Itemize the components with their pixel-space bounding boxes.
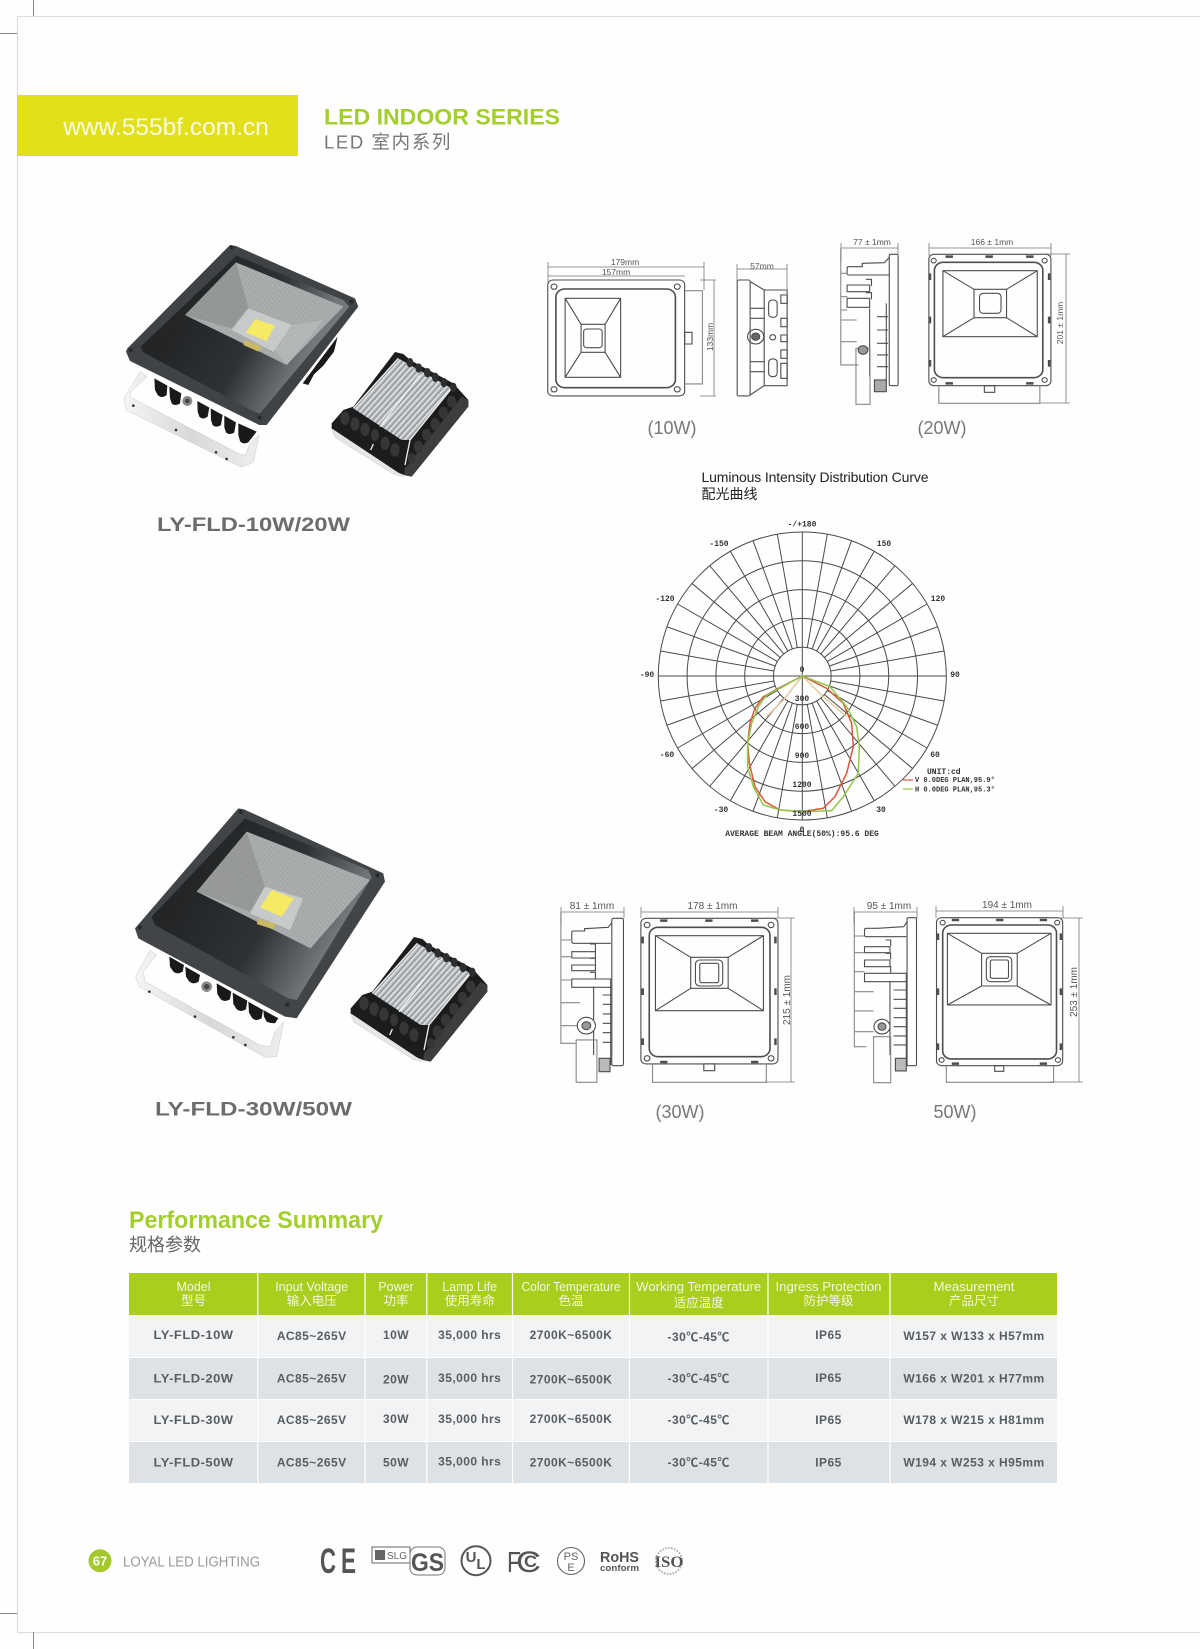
caption: (30W): (30W) <box>656 1102 704 1122</box>
dimension drawing: 30W: 81 ± 1mm <box>570 901 614 912</box>
table header row <box>129 1273 1057 1315</box>
table header row: Model <box>176 1280 211 1294</box>
table row: LY-FLD-10W: -30℃-45℃ <box>668 1330 730 1344</box>
header banner: www.555bf.com.cn <box>62 114 269 141</box>
icon: UL mark: L <box>476 1556 486 1573</box>
polar chart: luminous distribution: -/+180 <box>788 520 817 530</box>
table row: LY-FLD-30W: LY-FLD-30W <box>154 1413 234 1427</box>
table row: LY-FLD-10W: IP65 <box>815 1328 842 1342</box>
polar chart: luminous distribution: 600 <box>795 723 809 732</box>
polar chart: luminous distribution <box>640 520 995 839</box>
dimension drawing: 30W: 215 ± 1mm <box>782 975 793 1025</box>
polar chart: luminous distribution: 150 <box>877 540 891 549</box>
polar chart: luminous distribution: 0 <box>800 666 805 675</box>
dimension drawing: 20W: 77 ± 1mm <box>853 237 891 247</box>
table row: LY-FLD-50W <box>129 1442 1057 1483</box>
header banner <box>17 95 298 156</box>
table row: LY-FLD-30W: AC85~265V <box>277 1413 347 1427</box>
heading: luminous intensity curve: Luminous Intensity Distribution Curve <box>702 469 929 485</box>
table row: LY-FLD-30W <box>129 1400 1057 1441</box>
table row: LY-FLD-20W: 2700K~6500K <box>530 1372 612 1386</box>
dimension drawing: 10W: 157mm <box>602 267 630 277</box>
polar chart: luminous distribution: -120 <box>655 595 675 604</box>
table row: LY-FLD-20W: AC85~265V <box>277 1372 347 1386</box>
dimension drawing: 20W: 201 ± 1mm <box>1055 302 1065 344</box>
polar chart: luminous distribution: 30 <box>876 806 886 815</box>
table header row: Ingress Protection <box>776 1280 882 1294</box>
icon: FCC mark: C <box>516 1546 541 1579</box>
polar chart: luminous distribution: H 0.0DEG PLAN,95.3° <box>915 786 995 794</box>
table row: LY-FLD-50W: LY-FLD-50W <box>154 1456 234 1470</box>
table row: LY-FLD-50W: -30℃-45℃ <box>668 1456 730 1470</box>
table row: LY-FLD-30W: W178 x W215 x H81mm <box>903 1413 1045 1427</box>
product photo: LY-FLD-30W/50W flood light <box>135 808 385 1057</box>
polar chart: luminous distribution: 900 <box>795 752 809 761</box>
dimension drawing: 20W <box>841 237 1070 404</box>
table row: LY-FLD-10W: AC85~265V <box>277 1329 347 1343</box>
table row: LY-FLD-10W: LY-FLD-10W <box>154 1328 234 1342</box>
page number badge: 67 <box>93 1554 107 1568</box>
icon: RoHS conform <box>600 1550 639 1574</box>
icon: FCC mark: C <box>524 1552 537 1571</box>
polar chart: luminous distribution: 300 <box>795 695 809 704</box>
polar chart: luminous distribution: -90 <box>640 671 654 680</box>
table row: LY-FLD-30W: 30W <box>383 1412 409 1426</box>
table header row: Power <box>378 1280 414 1294</box>
table header row: Measurement <box>934 1280 1015 1294</box>
icon: PSE mark: PS <box>564 1551 578 1563</box>
dimension drawing: 10W: 57mm <box>750 261 774 271</box>
dimension drawing: 10W: 133mm <box>705 323 715 351</box>
icon: FCC mark <box>507 1546 541 1579</box>
icon: FCC mark: F <box>507 1547 521 1579</box>
table header row: Color Temperature <box>522 1280 621 1294</box>
dimension drawing: 30W <box>561 901 795 1082</box>
table row: LY-FLD-50W: W194 x W253 x H95mm <box>903 1456 1045 1470</box>
table row: LY-FLD-50W: 35,000 hrs <box>438 1454 501 1468</box>
title: LED 室内系列 <box>324 132 452 152</box>
polar chart: luminous distribution: 1200 <box>792 781 812 790</box>
heading: luminous intensity curve <box>702 469 929 502</box>
model label: LY-FLD-10W/20W: LY-FLD-10W/20W <box>157 515 350 536</box>
dimension drawing: 50W <box>854 900 1083 1083</box>
table header row: 型号 <box>181 1294 206 1308</box>
polar chart: luminous distribution: 1500 <box>792 810 812 819</box>
table header row: 色温 <box>558 1293 584 1308</box>
table row: LY-FLD-10W: 35,000 hrs <box>438 1328 501 1342</box>
table row: LY-FLD-20W: LY-FLD-20W <box>154 1372 234 1386</box>
caption: (20W): (20W) <box>918 418 966 438</box>
dimension drawing: 10W <box>548 257 787 396</box>
table header row: Working Temperature <box>636 1280 761 1294</box>
table: performance summary <box>129 1273 1057 1483</box>
icon: CE mark: E <box>341 1542 356 1581</box>
table header row: Input Voltage <box>275 1280 348 1294</box>
heading: luminous intensity curve: 配光曲线 <box>702 486 758 502</box>
polar chart: luminous distribution: AVERAGE BEAM ANGLE(50%):95.6 DEG <box>725 830 879 839</box>
icon: SLG GS mark: SLG <box>387 1551 407 1562</box>
polar chart: luminous distribution: 90 <box>950 671 960 680</box>
table row: LY-FLD-10W: W157 x W133 x H57mm <box>903 1329 1045 1343</box>
table row: LY-FLD-20W: W166 x W201 x H77mm <box>903 1372 1045 1386</box>
model label: LY-FLD-30W/50W: LY-FLD-30W/50W <box>155 1100 352 1120</box>
table row: LY-FLD-30W: 35,000 hrs <box>438 1412 501 1426</box>
dimension drawing: 20W: 166 ± 1mm <box>971 237 1013 247</box>
icon: UL mark: U <box>466 1549 476 1566</box>
table row: LY-FLD-30W: -30℃-45℃ <box>668 1413 730 1427</box>
table row: LY-FLD-50W: AC85~265V <box>277 1456 347 1470</box>
table row: LY-FLD-20W <box>129 1358 1057 1399</box>
icon: PSE mark: E <box>567 1562 575 1574</box>
table header row: 适应温度 <box>674 1295 724 1310</box>
polar chart: luminous distribution: V 0.0DEG PLAN,95.9° <box>915 776 995 785</box>
icon: ISO mark: ISO <box>654 1554 684 1571</box>
polar chart: luminous distribution: UNIT:cd <box>927 768 961 777</box>
table row: LY-FLD-50W: 50W <box>383 1456 409 1470</box>
table row: LY-FLD-30W: IP65 <box>815 1413 842 1427</box>
table row: LY-FLD-30W: 2700K~6500K <box>530 1412 612 1426</box>
product photo: LY-FLD-10W/20W LED module <box>331 352 468 477</box>
icon: UL mark <box>462 1546 490 1575</box>
heading: performance summary: Performance Summary <box>129 1207 384 1234</box>
table row: LY-FLD-20W: 20W <box>383 1372 409 1386</box>
caption: 50W): 50W) <box>933 1102 977 1122</box>
dimension drawing: 10W: 179mm <box>611 257 639 267</box>
page number badge <box>88 1549 112 1572</box>
table row: LY-FLD-10W: 10W <box>383 1328 409 1342</box>
table row: LY-FLD-10W <box>129 1316 1057 1357</box>
polar chart: luminous distribution: -150 <box>709 540 729 549</box>
heading: performance summary <box>129 1207 384 1255</box>
table header row: Lamp Life <box>442 1280 497 1294</box>
icon: SLG GS mark: GS <box>411 1549 444 1577</box>
icon: CE mark: C <box>320 1542 336 1581</box>
table row: LY-FLD-10W: 2700K~6500K <box>530 1328 612 1342</box>
polar chart: luminous distribution: -60 <box>660 751 674 760</box>
footer brand text: LOYAL LED LIGHTING <box>123 1554 260 1570</box>
table row: LY-FLD-50W: IP65 <box>815 1456 842 1470</box>
polar chart: luminous distribution: 0 <box>800 826 805 835</box>
icon: SLG GS mark <box>372 1547 445 1577</box>
dimension drawing: 50W: 253 ± 1mm <box>1069 967 1080 1017</box>
icon: RoHS conform: conform <box>600 1563 639 1574</box>
table header row: 输入电压 <box>287 1293 337 1308</box>
table row: LY-FLD-20W: -30℃-45℃ <box>668 1372 730 1386</box>
dimension drawing: 50W: 194 ± 1mm <box>982 900 1032 911</box>
table header row: 防护等级 <box>803 1293 854 1308</box>
icon: ISO mark <box>654 1548 684 1574</box>
table header row: 产品尺寸 <box>949 1294 999 1308</box>
title <box>324 104 560 152</box>
dimension drawing: 30W: 178 ± 1mm <box>688 901 737 912</box>
table header row: 使用寿命 <box>445 1293 495 1308</box>
table row: LY-FLD-20W: IP65 <box>815 1371 842 1385</box>
polar chart: luminous distribution: 120 <box>931 595 945 604</box>
table header row: 功率 <box>383 1293 409 1308</box>
polar chart: luminous distribution: 60 <box>930 751 940 760</box>
heading: performance summary: 规格参数 <box>129 1235 201 1255</box>
icon: RoHS conform: RoHS <box>600 1550 639 1566</box>
polar chart: luminous distribution: -30 <box>714 806 728 815</box>
title: LED INDOOR SERIES <box>324 104 560 130</box>
product photo: LY-FLD-10W/20W flood light <box>124 245 358 467</box>
dimension drawing: 50W: 95 ± 1mm <box>867 901 911 912</box>
product photo: LY-FLD-30W/50W LED module <box>350 937 487 1062</box>
icon: PSE mark <box>558 1548 584 1574</box>
table row: LY-FLD-20W: 35,000 hrs <box>438 1371 501 1385</box>
caption: (10W): (10W) <box>648 418 696 438</box>
table row: LY-FLD-50W: 2700K~6500K <box>530 1456 612 1470</box>
